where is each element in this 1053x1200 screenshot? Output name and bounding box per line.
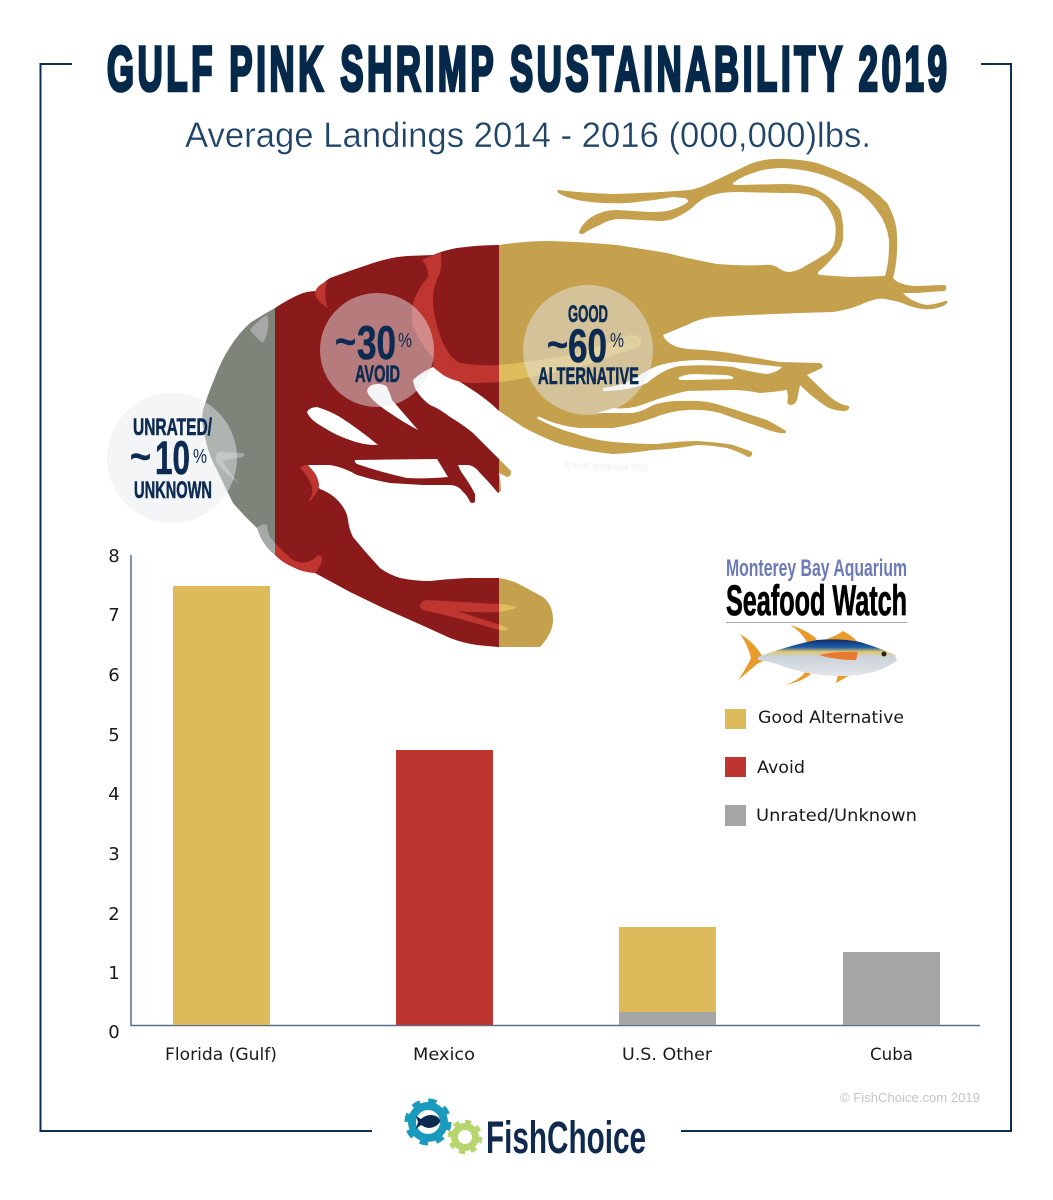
chart axes: [131, 555, 980, 1026]
title: GULF PINK SHRIMP SUSTAINABILITY 2019: [107, 33, 947, 104]
callout: good alternative 60 percent: %: [610, 330, 624, 352]
x axis labels: Cuba: [870, 1045, 913, 1065]
callout: good alternative 60 percent: [523, 285, 653, 415]
callout: unrated 10 percent: ~: [130, 435, 151, 479]
y axis labels: 4: [108, 784, 120, 805]
shrimp body: [202, 159, 948, 647]
bar: Mexico: [396, 750, 493, 1025]
y axis labels: 7: [108, 605, 120, 626]
bar chart: [108, 546, 980, 1065]
icon: blue gear with fish: [407, 1101, 449, 1143]
FishChoice logo: [407, 1101, 646, 1163]
legend item: good alternative: Good Alternative: [758, 708, 904, 728]
callout: avoid 30 percent: %: [398, 330, 412, 352]
legend item: avoid: Avoid: [757, 758, 805, 778]
x axis labels: [165, 1045, 913, 1065]
callout: good alternative 60 percent: ALTERNATIVE: [538, 363, 639, 390]
legend: [725, 708, 917, 826]
y axis labels: 1: [108, 963, 120, 984]
legend item: unrated/unknown: Unrated/Unknown: [756, 806, 917, 826]
y axis labels: 5: [108, 725, 120, 746]
icon: green gear: [450, 1122, 480, 1152]
legend item: avoid: [725, 757, 805, 778]
copyright: © FishChoice.com 2019: [840, 1091, 980, 1105]
y axis labels: 8: [108, 546, 120, 567]
callout: good alternative 60 percent: 60: [568, 319, 607, 372]
logo heading: Monterey Bay Aquarium: [726, 555, 907, 582]
callout: avoid 30 percent: 30: [357, 316, 396, 369]
shrimp watermark: © FishChoice.com 2019: [565, 460, 648, 474]
x axis labels: Florida (Gulf): [165, 1045, 277, 1065]
logo divider: [726, 622, 907, 623]
callout: avoid 30 percent: [320, 293, 434, 407]
y axis labels: 2: [108, 904, 120, 925]
shrimp silhouette: [202, 159, 948, 647]
subtitle: Average Landings 2014 - 2016 (000,000)lbs.: [185, 116, 871, 155]
callout: unrated 10 percent: [107, 393, 237, 523]
callout: good alternative 60 percent: GOOD: [568, 301, 608, 328]
bar: Florida (Gulf): [173, 586, 270, 1025]
bar: Cuba: [843, 952, 940, 1025]
icon: tuna fish: [738, 625, 897, 685]
callout: good alternative 60 percent: ~: [547, 323, 568, 367]
logo wordmark: Seafood Watch: [726, 577, 907, 625]
y axis labels: 3: [108, 844, 120, 865]
callout: avoid 30 percent: ~: [335, 320, 356, 364]
y axis labels: [108, 546, 120, 1043]
callout: unrated 10 percent: %: [193, 446, 207, 468]
x axis labels: Mexico: [413, 1045, 475, 1065]
Seafood Watch logo: [726, 555, 907, 685]
FishChoice wordmark: FishChoice: [486, 1112, 646, 1163]
callout: avoid 30 percent: AVOID: [355, 361, 400, 388]
bar: U.S. Other: [619, 927, 716, 1025]
callout: unrated 10 percent: UNRATED/: [133, 414, 212, 441]
callout: unrated 10 percent: UNKNOWN: [134, 477, 212, 504]
shrimp shell highlights: [216, 253, 641, 630]
x axis labels: U.S. Other: [622, 1045, 712, 1065]
y axis labels: 0: [108, 1022, 120, 1043]
callout: unrated 10 percent: 10: [155, 431, 190, 484]
y axis labels: 6: [108, 665, 120, 686]
